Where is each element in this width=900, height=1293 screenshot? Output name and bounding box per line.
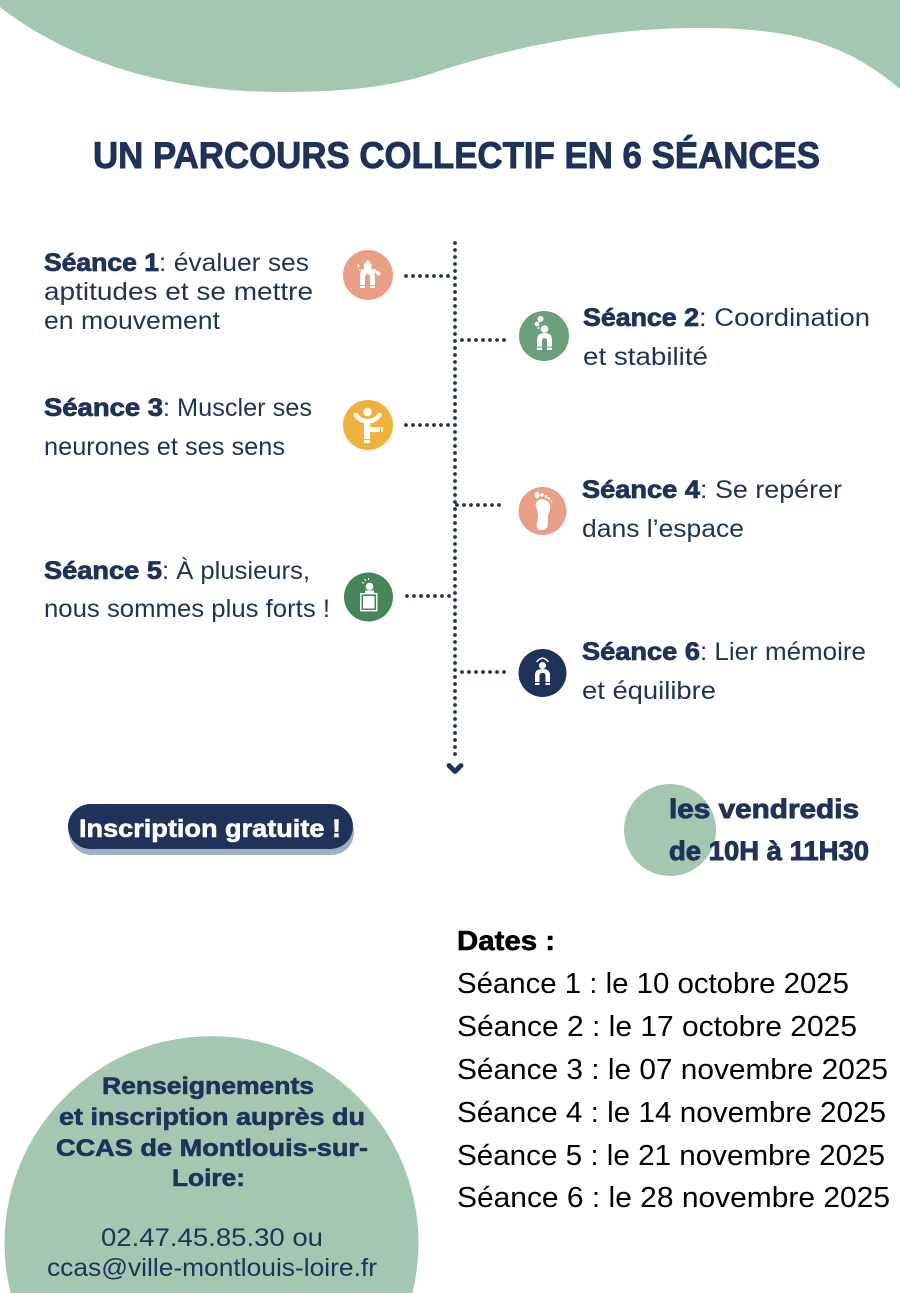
text: séance 1 xyxy=(44,249,313,335)
text: séance 3: : Muscler ses xyxy=(163,394,312,422)
text: séance 6: et équilibre xyxy=(582,677,716,705)
text: séance 3: neurones et ses sens xyxy=(44,433,285,461)
text: séance 1: aptitudes et se mettre xyxy=(44,278,313,306)
icon: séance 3 balancing figure xyxy=(343,400,393,450)
text: séance 2: : Coordination xyxy=(699,304,870,332)
title: UN PARCOURS COLLECTIF EN 6 SÉANCES xyxy=(93,135,820,176)
contact circle: CCAS de Montlouis-sur- xyxy=(56,1135,368,1162)
text: séance 1: en mouvement xyxy=(44,307,220,335)
button: inscription gratuite: Inscription gratuite ! xyxy=(79,815,341,843)
text: séance 6 xyxy=(582,638,866,705)
dates list: Séance 1 : le 10 octobre 2025 xyxy=(457,968,849,1000)
schedule callout: les vendredis xyxy=(669,794,859,824)
contact circle: Loire: xyxy=(172,1165,245,1192)
text: séance 6: : Lier mémoire xyxy=(700,638,866,666)
contact circle: ccas@ville-montlouis-loire.fr xyxy=(47,1254,377,1282)
text: séance 1: Séance 1 xyxy=(44,249,159,277)
button: inscription gratuite xyxy=(68,804,354,855)
contact circle: Renseignements xyxy=(102,1073,314,1100)
contact circle xyxy=(4,1036,418,1293)
top green wave xyxy=(0,0,900,92)
text: séance 2: Séance 2 xyxy=(583,304,699,332)
schedule callout xyxy=(624,784,869,876)
icon: séance 6 figure with arrow xyxy=(518,649,566,697)
dates list: Dates : xyxy=(457,925,555,956)
text: séance 5: nous sommes plus forts ! xyxy=(44,595,330,623)
icon: séance 5 figure on box xyxy=(344,572,393,622)
text: séance 1: : évaluer ses xyxy=(159,249,309,277)
text: séance 2: et stabilité xyxy=(583,343,708,371)
dates list xyxy=(457,925,890,1214)
text: séance 4: dans l’espace xyxy=(582,515,744,543)
text: séance 5: : À plusieurs, xyxy=(162,556,310,585)
dates list: Séance 5 : le 21 novembre 2025 xyxy=(457,1140,885,1172)
text: séance 2 xyxy=(583,304,870,371)
icon: séance 1 raised hand xyxy=(343,250,393,300)
text: séance 5: Séance 5 xyxy=(44,557,162,585)
text: séance 6: Séance 6 xyxy=(582,638,700,666)
schedule callout: de 10H à 11H30 xyxy=(669,836,869,866)
text: séance 3: Séance 3 xyxy=(44,394,163,422)
text: séance 4: : Se repérer xyxy=(700,476,842,504)
text: séance 4 xyxy=(582,476,842,543)
icon: séance 4 foot xyxy=(518,487,566,535)
dates list: Séance 3 : le 07 novembre 2025 xyxy=(457,1054,888,1086)
contact circle: 02.47.45.85.30 ou xyxy=(101,1224,323,1252)
text: séance 5 xyxy=(44,556,330,623)
dates list: Séance 6 : le 28 novembre 2025 xyxy=(457,1182,890,1214)
text: séance 3 xyxy=(44,394,312,461)
dates list: Séance 2 : le 17 octobre 2025 xyxy=(457,1011,857,1043)
dates list: Séance 4 : le 14 novembre 2025 xyxy=(457,1097,886,1129)
icon: séance 2 head with bubbles xyxy=(519,311,569,361)
timeline xyxy=(406,243,507,772)
text: séance 4: Séance 4 xyxy=(582,476,700,504)
contact circle: et inscription auprès du xyxy=(59,1104,365,1131)
